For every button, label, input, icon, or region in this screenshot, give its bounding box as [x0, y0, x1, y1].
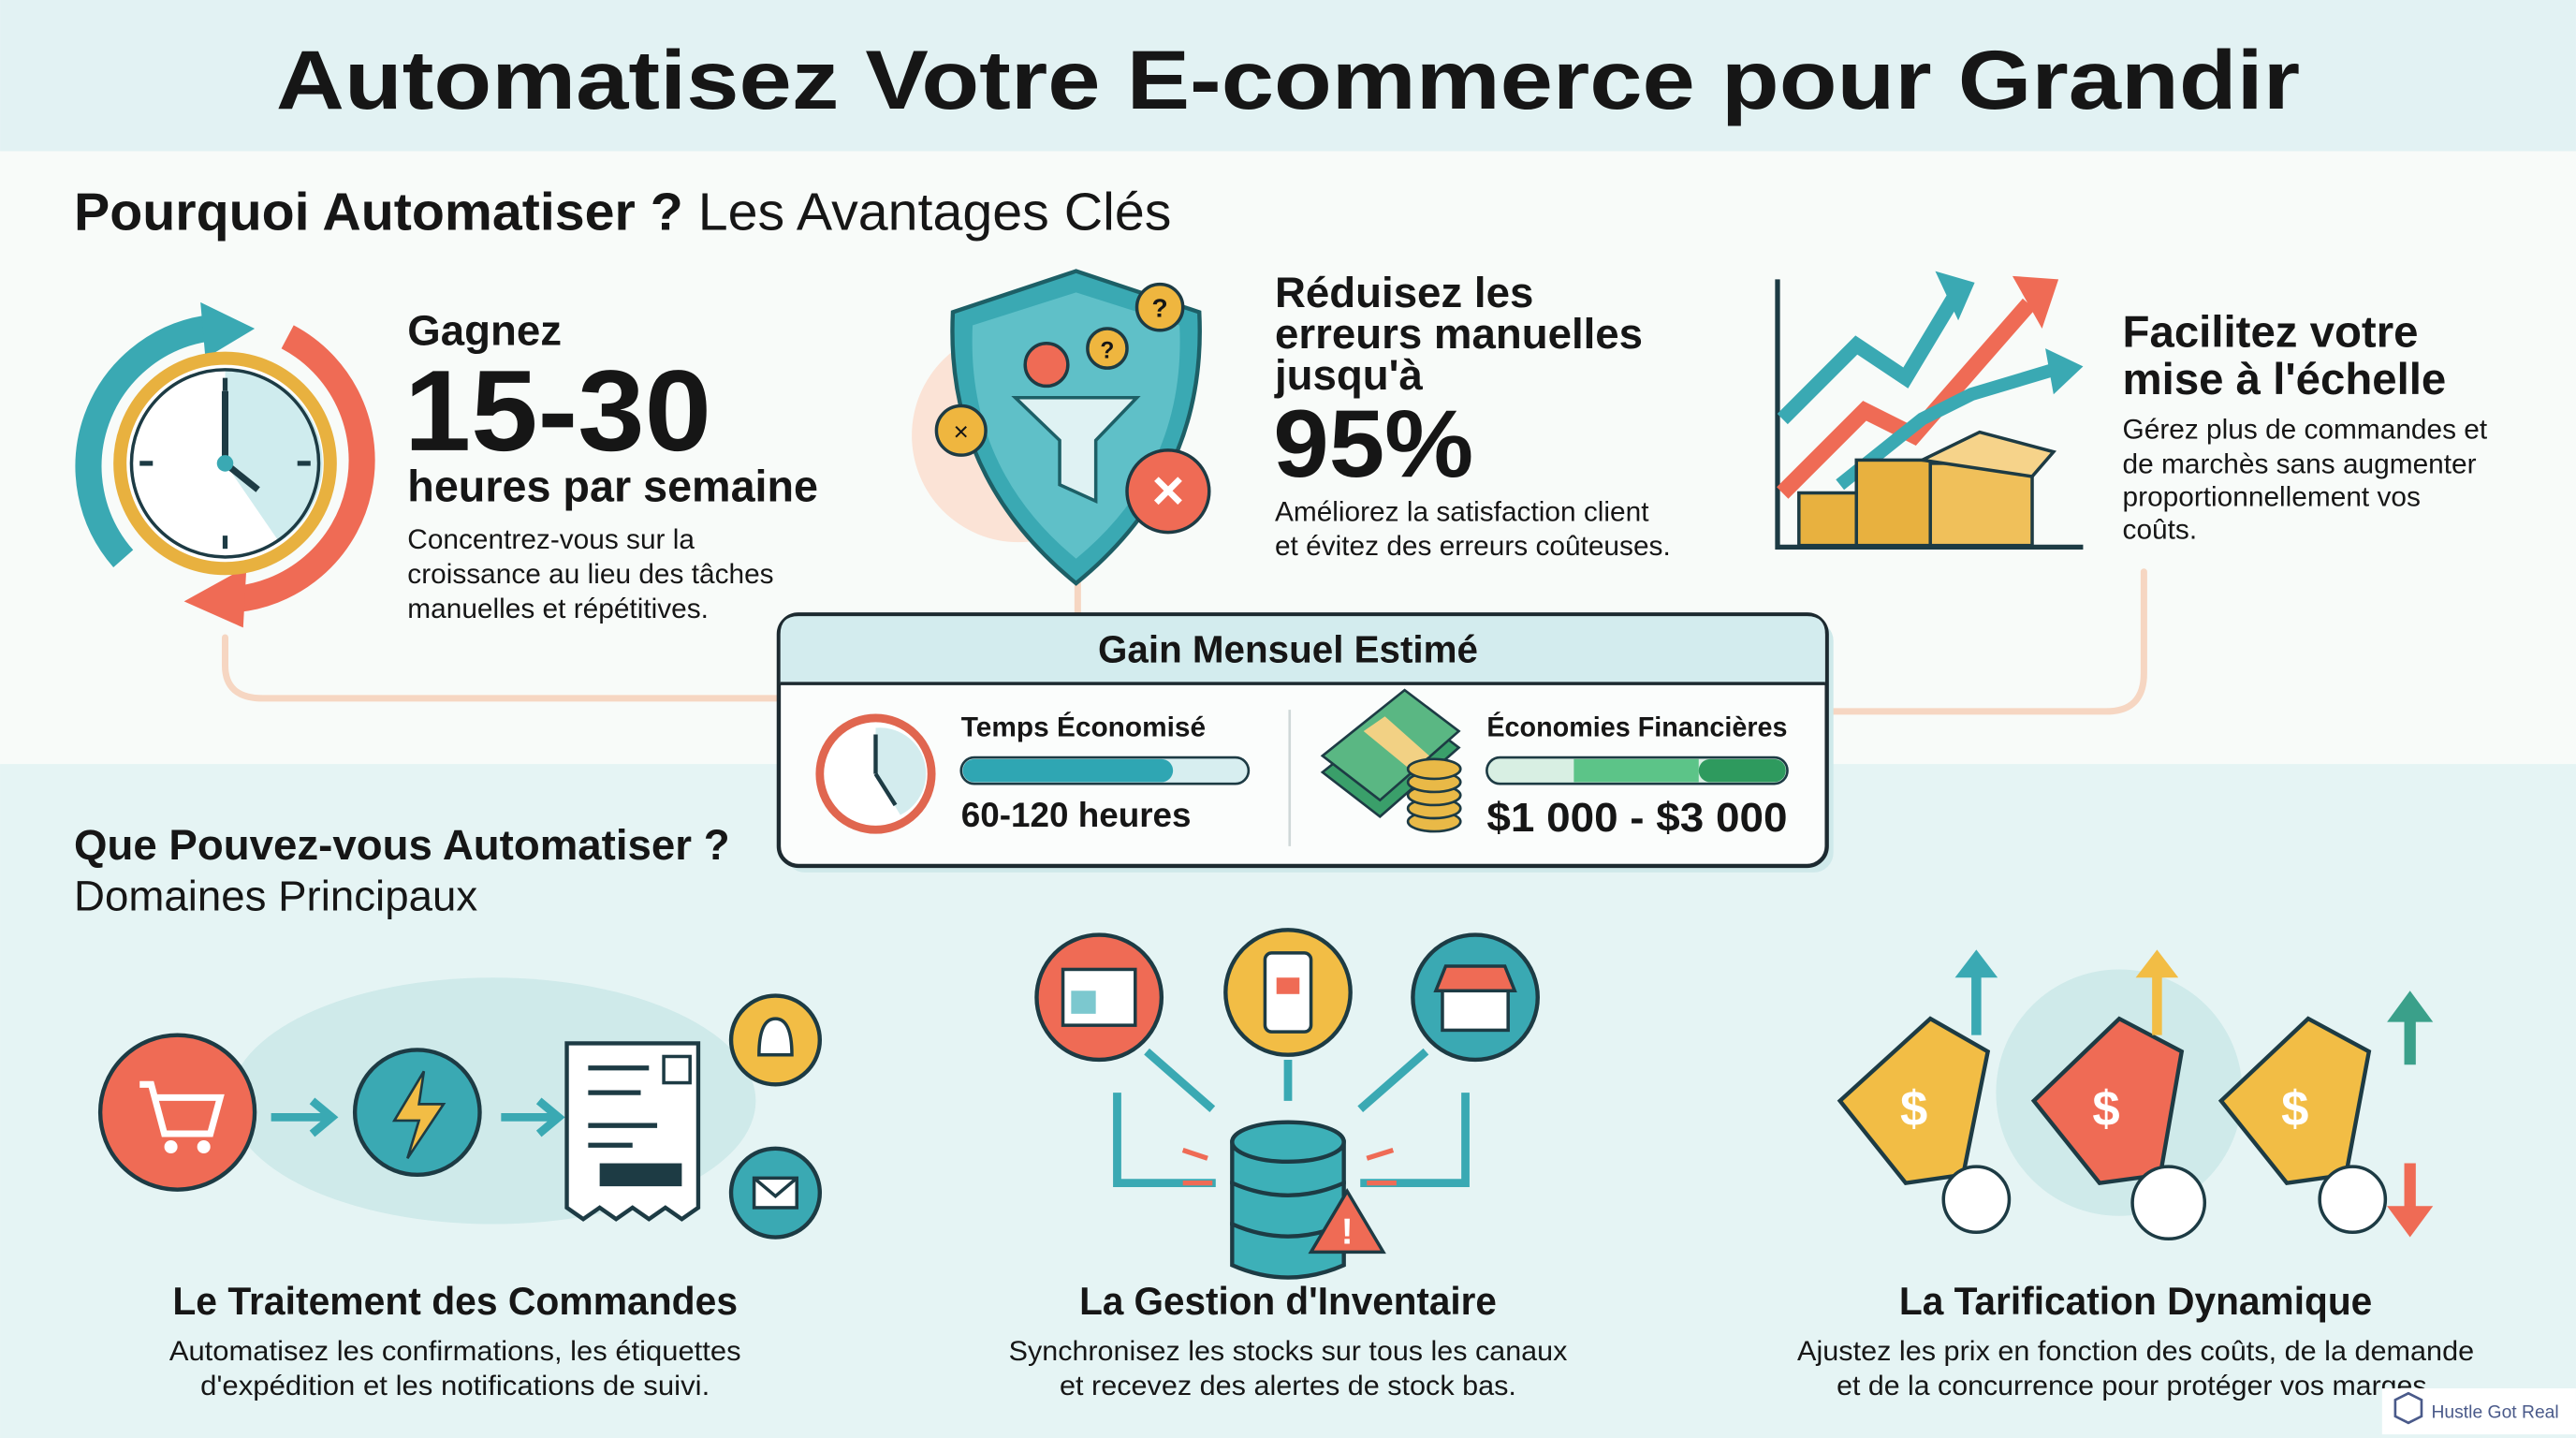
watermark: Hustle Got Real [2431, 1403, 2559, 1423]
text: gagnez: heures par semaine [407, 462, 818, 511]
text: echelle: coûts. [2123, 515, 2197, 546]
text: traitement des commandes: d'expédition et les notifications de suivi. [200, 1371, 710, 1401]
text: erreurs: erreurs manuelles [1275, 310, 1643, 358]
icon group: dynamic pricing [1840, 949, 2433, 1239]
icon: money and coins [1323, 690, 1460, 831]
icon group: dynamic pricing: $ [1900, 1081, 1927, 1137]
icon: shield with funnel: ? [1100, 339, 1114, 364]
watermark [2382, 1388, 2576, 1434]
section heading: que pouvez-vous [74, 821, 730, 919]
icon group: inventory [1036, 930, 1538, 1278]
text: tarification dynamique: La Tarification Dynamique [1899, 1279, 2372, 1323]
text: erreurs: jusqu'à [1274, 351, 1423, 399]
panel: gain mensuel estimé: $1 000 - $3 000 [1486, 795, 1788, 841]
icon: shield with funnel [912, 271, 1209, 583]
icon: shield with funnel: × [1151, 459, 1184, 521]
section heading: pourquoi: Pourquoi Automatiser ? Les Avantages Clés [74, 183, 1171, 242]
section heading: que pouvez-vous: Domaines Principaux [74, 872, 477, 919]
icon: clock with arrows [89, 302, 362, 627]
text: gagnez: Concentrez-vous sur la [407, 524, 695, 555]
text: gagnez: manuelles et répétitives. [407, 594, 709, 624]
text: gagnez [404, 307, 818, 624]
title: Automatisez Votre E-commerce pour Grandir [276, 33, 2300, 126]
text: erreurs: 95% [1273, 390, 1473, 497]
text: tarification dynamique: Ajustez les prix en fonction des coûts, de la demande [1797, 1336, 2474, 1367]
text: traitement des commandes: Automatisez les confirmations, les étiquettes [169, 1336, 741, 1367]
text: gagnez: 15-30 [404, 347, 711, 476]
text: erreurs: Réduisez les [1275, 269, 1533, 316]
text: gestion d'inventaire: La Gestion d'Inventaire [1079, 1279, 1497, 1323]
text: echelle [2123, 307, 2488, 546]
text: traitement des commandes [169, 1279, 741, 1401]
text: echelle: Facilitez votre [2123, 307, 2419, 357]
section heading: que pouvez-vous: Que Pouvez-vous Automatiser ? [74, 821, 730, 869]
connector lines [225, 572, 2144, 712]
icon: shield with funnel: × [954, 417, 969, 446]
panel: gain mensuel estimé: Économies Financières [1486, 711, 1788, 742]
text: echelle: de marchès sans augmenter [2123, 448, 2477, 479]
text: echelle: mise à l'échelle [2123, 355, 2446, 404]
text: echelle: Gérez plus de commandes et [2123, 415, 2488, 446]
icon: shield with funnel: ? [1152, 294, 1168, 323]
icon: small clock [820, 718, 931, 829]
text: erreurs [1273, 269, 1671, 562]
text: gestion d'inventaire: Synchronisez les stocks sur tous les canaux [1009, 1336, 1567, 1367]
icon: growth chart with boxes [1778, 271, 2083, 547]
text: echelle: proportionnellement vos [2123, 482, 2421, 513]
text: erreurs: et évitez des erreurs coûteuses. [1275, 531, 1671, 562]
title band [0, 0, 2576, 151]
text: gestion d'inventaire [1009, 1279, 1567, 1401]
text: gagnez: Gagnez [407, 307, 562, 355]
bar: time [961, 757, 1249, 784]
text: gestion d'inventaire: et recevez des alertes de stock bas. [1060, 1371, 1516, 1401]
text: erreurs: Améliorez la satisfaction client [1275, 496, 1649, 527]
icon group: dynamic pricing: $ [2092, 1081, 2120, 1137]
icon group: order processing [100, 977, 820, 1238]
icon group: dynamic pricing: $ [2281, 1081, 2308, 1137]
panel: gain mensuel estimé: 60-120 heures [961, 796, 1192, 834]
text: gagnez: croissance au lieu des tâches [407, 559, 774, 590]
text: tarification dynamique: et de la concurrence pour protéger vos marges. [1837, 1371, 2435, 1401]
panel: gain mensuel estimé: Temps Économisé [961, 711, 1206, 742]
bar: money [1486, 757, 1788, 784]
text: tarification dynamique [1797, 1279, 2474, 1401]
panel: gain mensuel estimé: Gain Mensuel Estimé [1098, 627, 1478, 670]
panel: gain mensuel estimé [779, 614, 1834, 873]
icon group: inventory: ! [1341, 1212, 1354, 1253]
text: traitement des commandes: Le Traitement des Commandes [172, 1279, 738, 1323]
